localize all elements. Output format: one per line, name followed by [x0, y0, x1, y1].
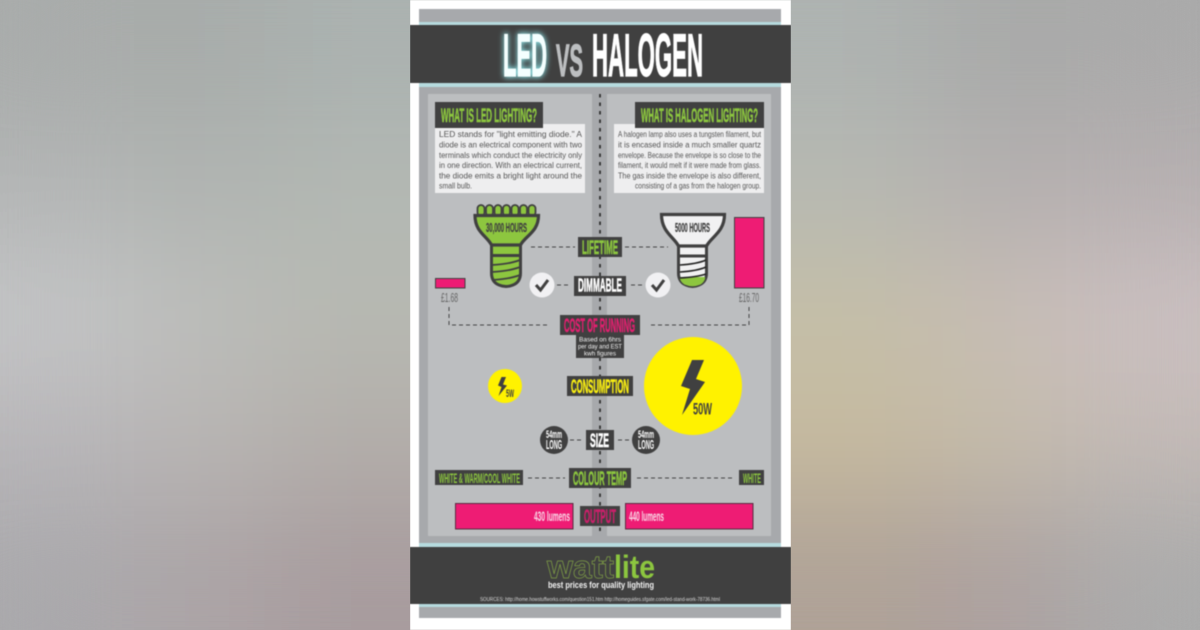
- header band: [410, 22, 791, 89]
- comparison panel: COLOUR TEMP: [573, 469, 627, 490]
- icon: halogen bulb: 5000 HOURS: [675, 220, 710, 235]
- label: colour temp: [569, 468, 631, 490]
- label: size: [586, 430, 614, 452]
- halogen explanation: The gas inside the envelope is also different,: [618, 172, 761, 180]
- bar: LED running cost: [436, 278, 465, 305]
- comparison panel: COST OF RUNNING: [564, 316, 635, 337]
- note: cost basis: kwh figures: [584, 350, 617, 358]
- infographic card: [410, 0, 791, 630]
- label: dimmable: [574, 276, 626, 296]
- icon: halogen consumption: 50W: [693, 400, 713, 418]
- halogen explanation: filament, it would melt if it were made from glass.: [618, 161, 761, 170]
- bar: halogen running cost: £16.70: [739, 290, 759, 305]
- halogen explanation: [614, 102, 764, 193]
- tagline: best prices for quality lighting: [548, 580, 654, 591]
- badge: halogen size: [632, 426, 660, 454]
- note: cost basis: Based on 6hrs: [579, 336, 622, 344]
- label: consumption: [567, 376, 633, 398]
- comparison panel: WHITE & WARM/COOL WHITE: [439, 471, 520, 486]
- bar: halogen running cost: [734, 218, 764, 305]
- infographic card: WHAT IS HALOGEN LIGHTING?: [641, 106, 758, 127]
- LED explanation: terminals which conduct the electricity only: [439, 151, 582, 160]
- bar: halogen output: 440 lumens: [629, 509, 664, 524]
- logo: wattlite: lite: [614, 549, 655, 585]
- LED explanation: in one direction. With an electrical current,: [439, 161, 582, 170]
- LED explanation: LED stands for "light emitting diode." A: [439, 130, 583, 139]
- logo: wattlite: watt: [546, 549, 614, 585]
- bar: LED output: [456, 504, 573, 529]
- title: [503, 22, 703, 89]
- icon: halogen dimmable check: [646, 272, 670, 298]
- footer band: [410, 547, 791, 604]
- title: LED: [503, 22, 547, 89]
- icon: LED bulb: [475, 205, 538, 286]
- label: output: [580, 506, 620, 528]
- badge: LED size: LONG: [546, 437, 562, 452]
- LED explanation: diode is an electrical component with two: [439, 140, 583, 150]
- bar: LED running cost: £1.68: [441, 290, 458, 305]
- halogen explanation: consisting of a gas from the halogen group.: [635, 182, 761, 190]
- LED explanation: WHAT IS LED LIGHTING?: [441, 106, 537, 127]
- icon: LED dimmable check: [530, 272, 554, 298]
- badge: LED size: 54mm: [546, 429, 562, 441]
- badge: halogen size: 54mm: [638, 429, 654, 441]
- note: cost basis: per day and EST: [578, 344, 622, 350]
- icon: LED bulb: 30,000 HOURS: [486, 220, 527, 235]
- comparison panel: CONSUMPTION: [571, 377, 629, 398]
- comparison panel: [428, 94, 771, 536]
- label: size: SIZE: [590, 431, 609, 452]
- comparison panel: OUTPUT: [584, 507, 616, 528]
- halogen explanation: envelope. Because the envelope is so close to the: [618, 151, 761, 160]
- sources: SOURCES: http://home.howstuffworks.com/question151.htm http://homeguides.sfgate.com/led-stand-work-78736.html: [480, 597, 720, 603]
- comparison panel: WHITE: [743, 471, 761, 486]
- icon: halogen bulb: [662, 214, 724, 286]
- icon: LED consumption: [488, 369, 522, 403]
- badge: halogen size: LONG: [638, 437, 654, 452]
- LED explanation: small bulb.: [439, 182, 472, 190]
- comparison panel: LIFETIME: [582, 238, 618, 259]
- badge: LED size: [540, 426, 568, 454]
- comparison panel: DIMMABLE: [578, 276, 622, 296]
- bar: LED output: 430 lumens: [534, 509, 570, 524]
- label: cost of running: [560, 315, 640, 337]
- bar: halogen output: [626, 504, 753, 529]
- logo: wattlite: [546, 549, 655, 585]
- label: lifetime: [578, 237, 622, 259]
- halogen explanation: it is encased inside a much smaller quartz: [618, 140, 761, 150]
- title: LED: [503, 22, 547, 89]
- title: VS: [556, 35, 583, 86]
- icon: LED consumption: 5W: [506, 388, 514, 400]
- note: cost basis: [576, 335, 624, 358]
- value: halogen colour temperature: [739, 470, 764, 486]
- value: LED colour temperature: [435, 470, 523, 486]
- LED explanation: [435, 102, 585, 193]
- halogen explanation: A halogen lamp also uses a tungsten filament, but: [618, 130, 762, 139]
- icon: halogen consumption: [644, 337, 742, 435]
- header band: HALOGEN: [592, 22, 703, 89]
- LED explanation: the diode emits a bright light around the: [439, 172, 582, 180]
